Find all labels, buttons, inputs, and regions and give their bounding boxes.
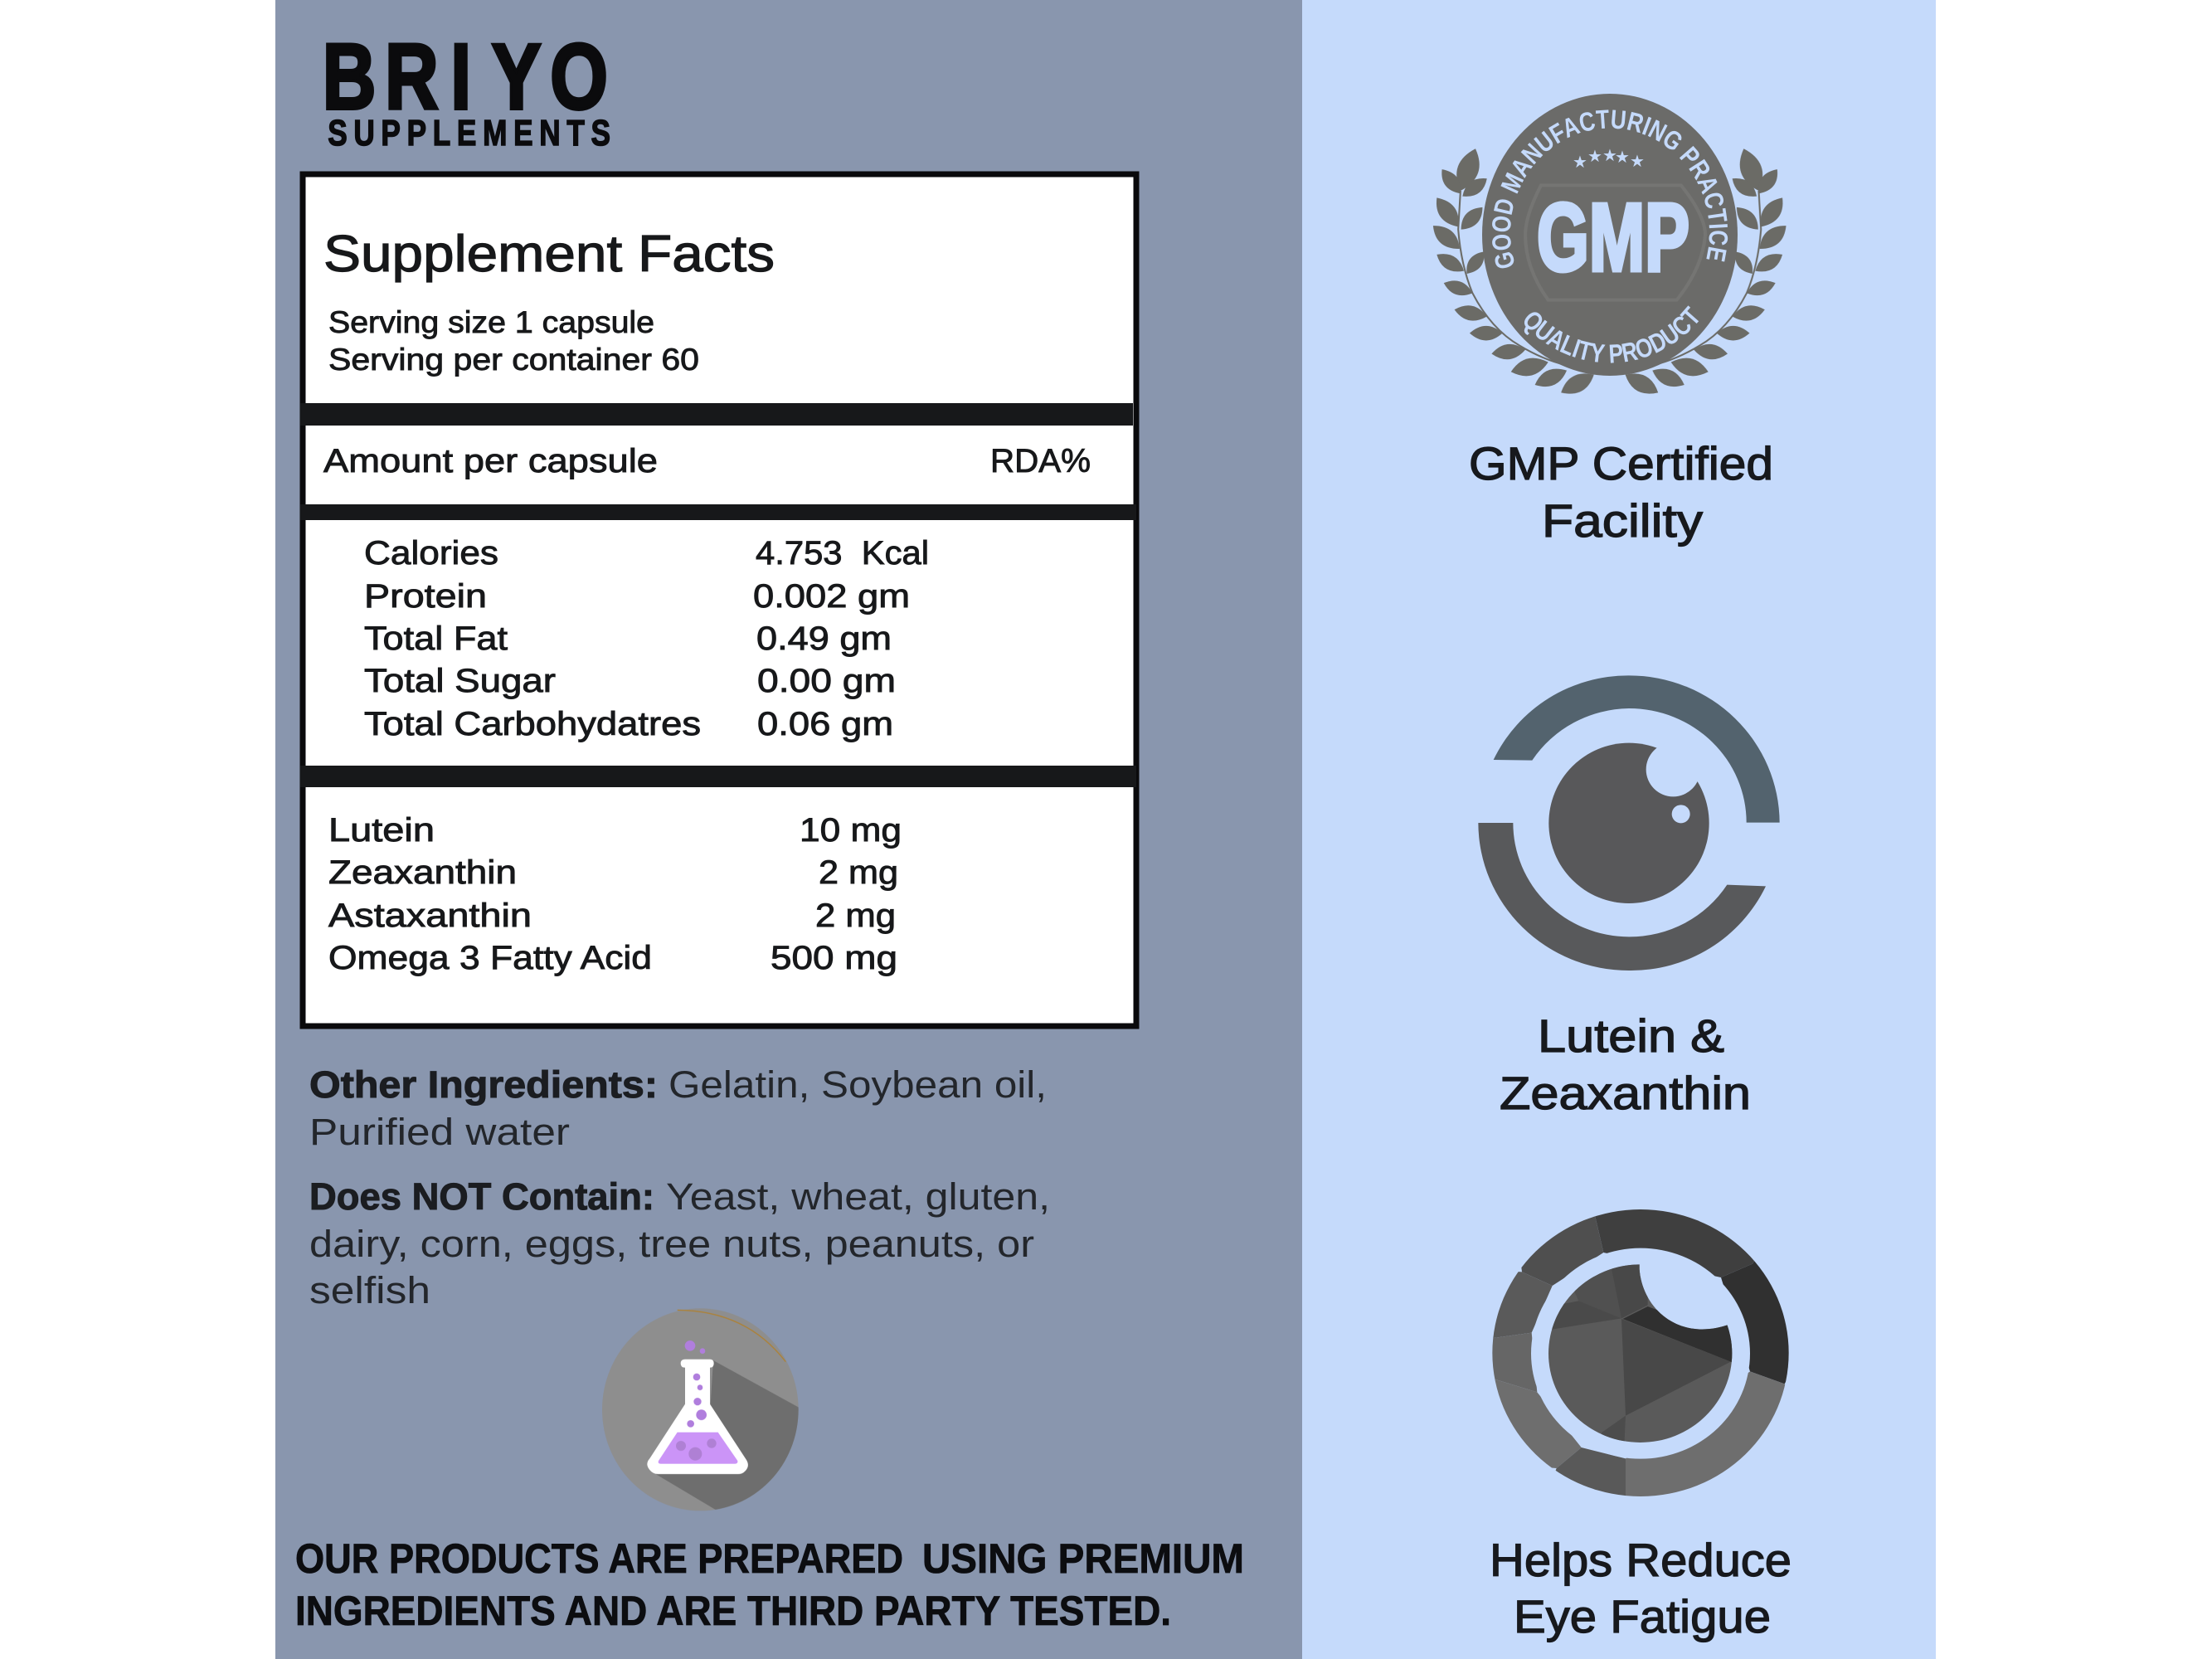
nutrition rows: [364, 535, 929, 742]
text block: does not contain: [309, 1175, 1050, 1311]
icon: GMP badge: QUALITY PRODUCT: [1524, 305, 1699, 363]
label: Lutein and Zeaxanthin: Lutein &: [1538, 1010, 1724, 1062]
stars: ★★★★★: [1573, 145, 1645, 172]
column headers: RDA%: [990, 443, 1091, 479]
label: GMP Certified Facility: Facility: [1542, 494, 1703, 547]
watermark text: Clinikally: [868, 132, 1241, 351]
active ingredient rows: 10 mg: [800, 812, 902, 849]
panel: benefits background: [1302, 0, 1936, 1659]
text block: other ingredients: [309, 1063, 1047, 1153]
nutrition rows: Calories: [364, 535, 498, 572]
text block: does not contain: dairy, corn, eggs, tree nuts, peanuts, or: [309, 1223, 1034, 1265]
seal disc: [1482, 94, 1738, 376]
active ingredient rows: Omega 3 Fatty Acid: [328, 940, 652, 976]
wreath: [1427, 145, 1791, 400]
watermark text: [55, 0, 2212, 1355]
nutrition rows: 0.06 gm: [757, 706, 893, 742]
watermark text: Clinikally: [55, 348, 428, 567]
nutrition rows: 0.002 gm: [753, 578, 910, 615]
nutrition rows: Total Sugar: [364, 663, 556, 699]
nutrition rows: Total Fat: [364, 620, 508, 657]
serving information: [328, 305, 699, 377]
column headers: Amount per capsule: [323, 443, 658, 479]
watermark text: Clinikally: [1009, 638, 1382, 857]
serving information: Serving per container 60: [328, 343, 699, 377]
text block: does not contain: Yeast, wheat, gluten,: [666, 1175, 1050, 1218]
watermark text: Clinikally: [1332, 273, 1705, 492]
active ingredient rows: 2 mg: [819, 854, 898, 891]
active ingredient rows: Astaxanthin: [328, 898, 532, 934]
text block: other ingredients: Other Ingredients:: [309, 1063, 658, 1106]
label: Helps Reduce Eye Fatigue: [1490, 1534, 1791, 1642]
icon: lab flask: [602, 1308, 802, 1515]
divider bar: [300, 504, 1136, 520]
active ingredient rows: Lutein: [328, 812, 435, 849]
text block: does not contain: Does NOT Contain:: [309, 1175, 654, 1218]
text block: quality statement: USING PREMIUM: [922, 1535, 1244, 1582]
text block: quality statement: OUR PRODUCTS ARE PREPARED: [295, 1535, 903, 1582]
active ingredient rows: [328, 812, 902, 976]
nutrition rows: Total Carbohydatres: [364, 706, 701, 742]
inner octagon: [1525, 185, 1705, 300]
active ingredient rows: 2 mg: [815, 898, 896, 934]
divider bar: [300, 766, 1136, 787]
label: Helps Reduce Eye Fatigue: Helps Reduce: [1490, 1534, 1791, 1586]
icon: faceted eye: [1492, 1209, 1789, 1496]
label: GMP Certified Facility: [1469, 437, 1773, 547]
nutrition rows: 0.00 gm: [757, 663, 896, 699]
label: Lutein and Zeaxanthin: [1500, 1010, 1751, 1119]
nutrition rows: 0.49 gm: [756, 620, 892, 657]
logo: Briyo Supplements: SUPPLEMENTS: [328, 113, 610, 153]
text block: does not contain: selfish: [309, 1269, 430, 1311]
text block: other ingredients: Purified water: [309, 1111, 570, 1153]
panel: supplement facts table: [300, 174, 1136, 1026]
active ingredient rows: 500 mg: [771, 940, 897, 976]
curved text: good manufacturing practice: [1510, 129, 1709, 268]
column headers: [323, 443, 1091, 479]
nutrition rows: Protein: [364, 578, 487, 615]
label: GMP Certified Facility: GMP Certified: [1469, 437, 1773, 489]
text block: quality statement: INGREDIENTS AND ARE THIRD PARTY TESTED.: [295, 1588, 1171, 1634]
GMP lettering: GMP: [1537, 183, 1689, 291]
active ingredient rows: Zeaxanthin: [328, 854, 517, 891]
watermark text: Clinikally: [1830, 406, 2203, 625]
curved text: quality product: [1519, 319, 1700, 362]
icon: eye with rings: [1478, 675, 1780, 971]
icon: GMP badge: [1433, 94, 1787, 394]
serving information: Serving size 1 capsule: [328, 305, 654, 339]
logo: Briyo Supplements: BRIYO: [323, 26, 608, 129]
heading: Supplement Facts: Supplement Facts: [323, 226, 775, 283]
label: Lutein and Zeaxanthin: Zeaxanthin: [1500, 1067, 1751, 1119]
nutrition rows: 4.753 Kcal: [756, 535, 929, 572]
divider bar: [300, 403, 1133, 426]
text block: other ingredients: Gelatin, Soybean oil,: [668, 1063, 1047, 1106]
panel: supplement information background: [275, 0, 1302, 1659]
label: Helps Reduce Eye Fatigue: Eye Fatigue: [1514, 1590, 1771, 1642]
watermark text: Clinikally: [1133, 1136, 1506, 1355]
text block: quality statement: [295, 1535, 1244, 1634]
icon: GMP badge: GOOD MANUFACTURING PRACTICE: [1492, 109, 1728, 269]
